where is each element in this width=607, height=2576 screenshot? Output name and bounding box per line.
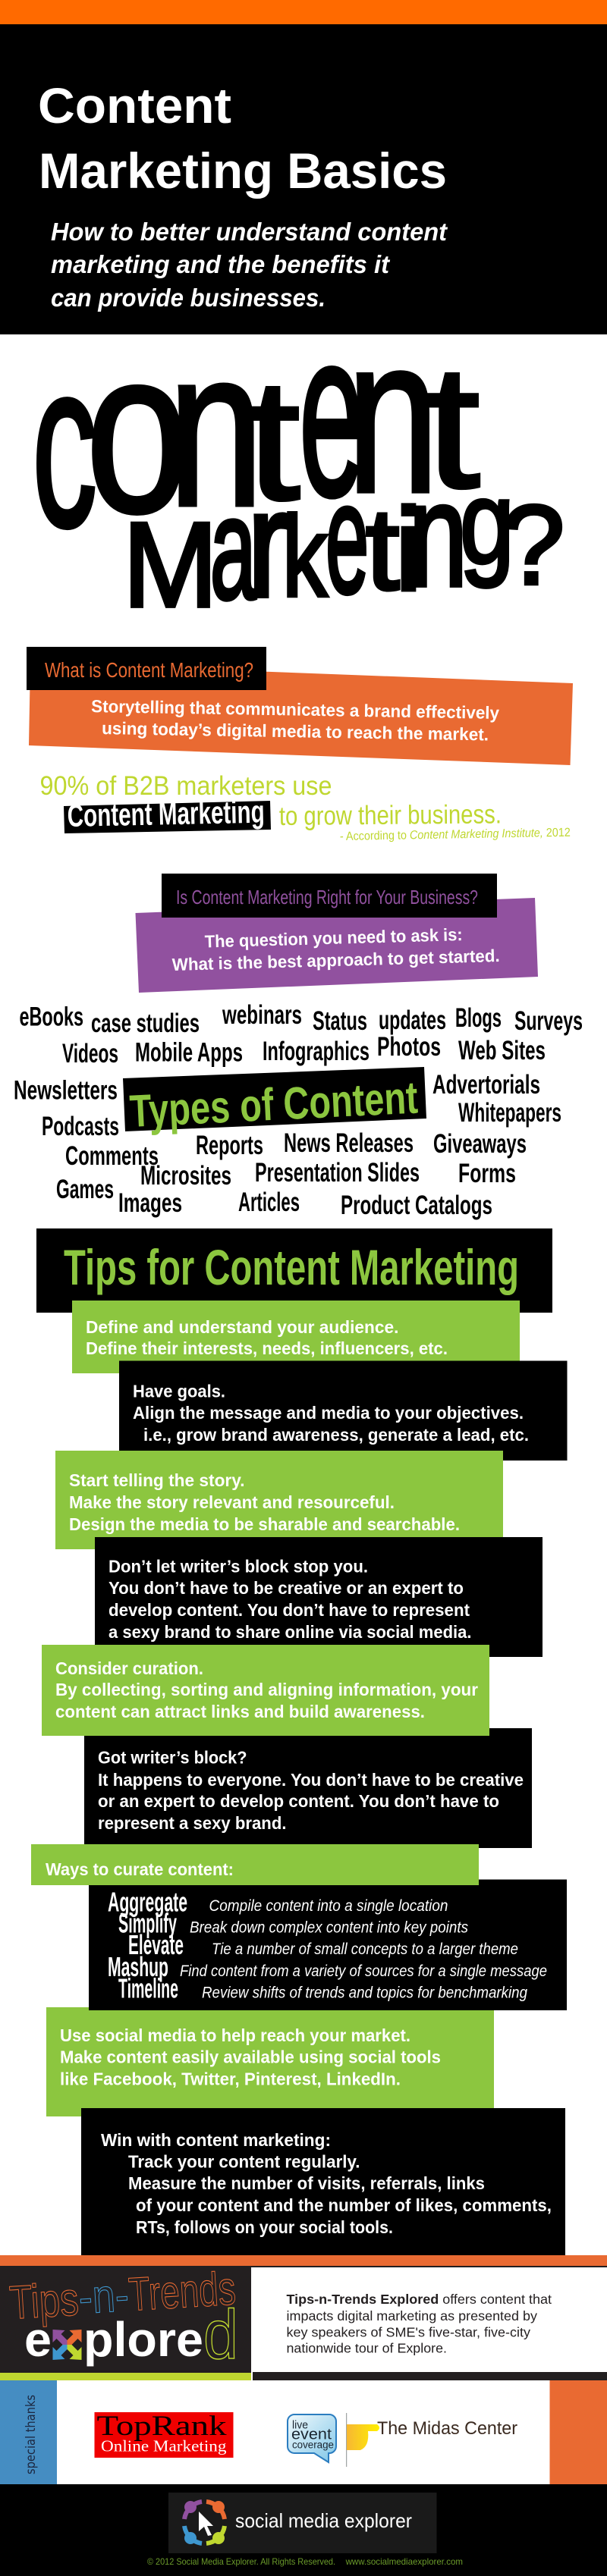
- icon: pointing hand: [347, 2424, 379, 2450]
- stat: 90% of B2B marketers: [39, 771, 571, 843]
- subtitle: [51, 218, 448, 312]
- word cloud: types of content: webinars: [222, 1000, 302, 1030]
- word cloud: types of content: News Releases: [284, 1128, 414, 1158]
- tip 8: use social media: [46, 2007, 567, 2116]
- word cloud: types of content: eBooks: [20, 1002, 83, 1031]
- panel: ways to curate list: [89, 1879, 567, 2010]
- word cloud: types of content: Blogs: [455, 1003, 502, 1033]
- tip 8: use social media: like Facebook, Twitter, Pinterest, LinkedIn.: [60, 2069, 401, 2088]
- word cloud: types of content: Status: [313, 1006, 367, 1036]
- special thanks label: special thanks: [24, 2395, 39, 2474]
- hand-lettered heading: Content Marketing?: e: [299, 282, 364, 546]
- logo wordmark: explored: [24, 2296, 238, 2374]
- tip 6: got writer's block: [84, 1728, 532, 1848]
- curation row: aggregate: Aggregate: [108, 1887, 187, 1917]
- tip 1: define audience: [72, 1301, 520, 1373]
- definition text: using today’s digital media to reach the market.: [102, 718, 489, 744]
- tip 6: got writer's block: It happens to everyone. You don’t have to be creative: [98, 1770, 524, 1790]
- copyright line: [147, 2556, 463, 2567]
- curation row: elevate: Elevate: [128, 1929, 184, 1960]
- word cloud: types of content: Microsites: [140, 1161, 231, 1191]
- tip 1: define audience: Define and understand your audience.: [86, 1317, 399, 1337]
- question text: What is the best approach to get started.: [171, 946, 500, 974]
- hand-lettered heading: Content Marketing?: n: [348, 292, 439, 538]
- tip 4: writer's block: a sexy brand to share online via social media.: [109, 1622, 472, 1642]
- hand-lettered heading: Content Marketing?: g: [460, 457, 514, 588]
- tip 7: ways to curate content: [31, 1844, 479, 1885]
- title: Content: [38, 77, 231, 133]
- wordmark letters: plore: [83, 2312, 203, 2367]
- tip 6: got writer's block: or an expert to develop content. You don’t have to: [98, 1791, 499, 1811]
- tip 5: consider curation: [42, 1645, 489, 1736]
- copyright line: © 2012 Social Media Explorer. All Rights Reserved.: [147, 2556, 335, 2567]
- tip 5: consider curation: content can attract links and build awareness.: [55, 1702, 425, 1721]
- tip 6: got writer's block: Got writer’s block?: [98, 1748, 247, 1768]
- curation row: mashup: Mashup: [108, 1951, 168, 1982]
- tip 2: have goals: Have goals.: [133, 1382, 225, 1401]
- word cloud: types of content: Product Catalogs: [341, 1191, 492, 1220]
- panel: what is content marketing: [27, 647, 573, 765]
- word cloud: types of content: Articles: [238, 1188, 300, 1217]
- tip 4: writer's block: You don’t have to be creative or an expert to: [109, 1578, 464, 1598]
- curation row: elevate: [128, 1929, 518, 1960]
- question text: The question you need to ask is:: [204, 924, 463, 951]
- hand-lettered heading: Content Marketing?: t: [426, 329, 480, 524]
- hand-lettered heading: Content Marketing?: r: [247, 459, 289, 629]
- logo: toprank online marketing: [94, 2411, 234, 2458]
- tip 3: telling the story: Make the story relevant and resourceful.: [69, 1492, 395, 1512]
- question text: [171, 924, 500, 974]
- word cloud: types of content: Podcasts: [42, 1112, 119, 1141]
- word cloud: types of content: Web Sites: [458, 1036, 546, 1065]
- icon: four-way arrows: [53, 2330, 82, 2360]
- curation row: timeline: [118, 1973, 527, 2004]
- icon: ring with cursor: [184, 2502, 225, 2543]
- source citation: - According to Content Marketing Institute, 2012: [340, 827, 571, 843]
- tip 3: telling the story: [55, 1451, 503, 1549]
- tip 8: use social media: Make content easily available using social tools: [60, 2047, 441, 2067]
- panel: special thanks: [0, 2380, 607, 2484]
- definition text: Storytelling that communicates a brand effectively: [91, 696, 499, 723]
- curation row: aggregate: [108, 1887, 448, 1917]
- logo: social media explorer: [168, 2493, 437, 2553]
- hand-lettered heading: Content Marketing?: e: [326, 450, 369, 626]
- copyright line: www.socialmediaexplorer.com: [345, 2556, 463, 2567]
- tip 4: writer's block: develop content. You don’t have to represent: [109, 1600, 470, 1620]
- description text: key speakers of SME's five-star, five-city: [287, 2325, 530, 2340]
- curation row: aggregate: Compile content into a single location: [209, 1897, 448, 1915]
- description text: nationwide tour of Explore.: [287, 2341, 447, 2356]
- label: what is content marketing: What is Content Marketing?: [45, 658, 253, 682]
- description text: impacts digital marketing as presented by: [287, 2308, 537, 2323]
- description text: Tips-n-Trends Explored offers content that: [287, 2292, 552, 2307]
- tip 9: win with content marketing: RTs, follows on your social tools.: [136, 2217, 393, 2237]
- word cloud: types of content: [14, 1000, 583, 1220]
- curation row: simplify: [118, 1908, 468, 1938]
- word cloud: types of content: Comments: [65, 1141, 159, 1171]
- tip 2: have goals: [119, 1360, 568, 1461]
- heading: tips for content marketing: [36, 1228, 552, 1313]
- tip 8: use social media: Use social media to help reach your market.: [60, 2025, 410, 2045]
- title: Marketing Basics: [39, 143, 447, 199]
- logo wordmark: explored: e: [24, 2312, 52, 2367]
- word cloud: types of content: Giveaways: [433, 1129, 527, 1159]
- label: content marketing: Content Marketing: [67, 794, 265, 833]
- subtitle: marketing and the benefits it: [51, 250, 391, 278]
- tip 2: have goals: i.e., grow brand awareness, generate a lead, etc.: [143, 1425, 529, 1445]
- hand-lettered heading: Content Marketing?: t: [366, 485, 399, 614]
- logo wordmark: social media explorer: [235, 2509, 412, 2532]
- word cloud: types of content: Games: [56, 1175, 114, 1204]
- tip 6: got writer's block: represent a sexy brand.: [98, 1813, 287, 1833]
- tip 5: consider curation: Consider curation.: [55, 1658, 203, 1678]
- word cloud: types of content: Images: [118, 1188, 182, 1218]
- logo wordmark: tips-n-trends: Tips: [8, 2273, 80, 2330]
- hand-lettered heading: Content Marketing?: i: [395, 485, 423, 616]
- curation row: simplify: Break down complex content into key points: [190, 1919, 468, 1937]
- tip 9: win with content marketing: Track your content regularly.: [128, 2152, 360, 2172]
- panel: tips-n-trends explored: [0, 2255, 607, 2380]
- logo: live event coverage: live: [292, 2419, 308, 2432]
- header panel: [0, 0, 607, 334]
- logo wordmark: tips-n-trends: [8, 2262, 237, 2330]
- logo: toprank online marketing: TopRank: [97, 2411, 227, 2442]
- word cloud: types of content: case studies: [91, 1009, 200, 1038]
- curation row: simplify: Simplify: [118, 1908, 177, 1938]
- tip 3: telling the story: Start telling the story.: [69, 1470, 244, 1490]
- stat continuation: to grow their business.: [279, 799, 502, 831]
- hand-lettered heading: Content Marketing?: M: [123, 497, 218, 632]
- tip 7: ways to curate content: Ways to curate content:: [46, 1859, 234, 1879]
- label: right for your business: Is Content Marketing Right for Your Business?: [176, 886, 478, 908]
- tip 2: have goals: Align the message and media to your objectives.: [133, 1403, 524, 1423]
- hand-lettered heading: Content Marketing?: k: [282, 492, 328, 620]
- tip 5: consider curation: By collecting, sorting and aligning information, your: [55, 1680, 478, 1699]
- subtitle: How to better understand content: [51, 218, 448, 246]
- logo: toprank online marketing: Online Marketing: [101, 2437, 227, 2455]
- logo: live event coverage: event: [291, 2427, 332, 2443]
- logo: live event coverage: [288, 2414, 336, 2462]
- curation row: mashup: Find content from a variety of sources for a single message: [180, 1963, 547, 1980]
- title: [38, 77, 447, 199]
- logo: the midas center: The Midas Center: [377, 2418, 517, 2439]
- description text: [287, 2292, 552, 2356]
- stat: 90% of B2B marketers: 90% of B2B marketers use: [39, 771, 332, 801]
- tip 3: telling the story: Design the media to be sharable and searchable.: [69, 1514, 460, 1534]
- word cloud: types of content: Newsletters: [14, 1075, 118, 1106]
- hand-lettered heading: Content Marketing?: ?: [502, 482, 565, 608]
- curation row: elevate: Tie a number of small concepts to a larger theme: [212, 1941, 518, 1958]
- word cloud: types of content: Reports: [196, 1131, 263, 1160]
- hand-lettered heading: Content Marketing?: c: [32, 313, 97, 576]
- tip 9: win with content marketing: [81, 2108, 565, 2255]
- curation row: timeline: Timeline: [118, 1973, 178, 2004]
- word cloud: types of content: Advertorials: [432, 1070, 540, 1100]
- word cloud: types of content: Photos: [377, 1032, 441, 1062]
- word cloud: types of content: Infographics: [263, 1037, 370, 1066]
- logo: live event coverage: coverage: [292, 2439, 334, 2450]
- hand-lettered heading: Content Marketing?: [32, 282, 565, 632]
- tip 9: win with content marketing: Win with content marketing:: [101, 2130, 331, 2150]
- curation row: timeline: Review shifts of trends and topics for benchmarking: [202, 1985, 527, 2002]
- definition text: [91, 696, 499, 744]
- hand-lettered heading: Content Marketing?: t: [247, 344, 300, 535]
- word cloud: types of content: Mobile Apps: [135, 1037, 243, 1068]
- tip 9: win with content marketing: Measure the number of visits, referrals, links: [128, 2173, 485, 2193]
- curation row: mashup: [108, 1951, 547, 1982]
- word cloud: types of content: Videos: [62, 1039, 118, 1068]
- outlined d: d: [203, 2296, 238, 2374]
- label: types of content: Types of Content: [128, 1072, 419, 1137]
- tip 4: writer's block: Don’t let writer’s block stop you.: [109, 1556, 368, 1576]
- footer panel: [0, 2484, 607, 2576]
- tip 4: writer's block: [95, 1537, 543, 1657]
- hand-lettered heading: Content Marketing?: o: [86, 303, 189, 560]
- tip 9: win with content marketing: of your content and the number of likes, comments,: [136, 2195, 552, 2215]
- hand-lettered heading: Content Marketing?: n: [168, 303, 263, 553]
- subtitle: can provide businesses.: [51, 284, 326, 312]
- hand-lettered heading: Content Marketing?: n: [409, 452, 467, 617]
- word cloud: types of content: Presentation Slides: [255, 1158, 420, 1188]
- word cloud: types of content: updates: [379, 1006, 446, 1035]
- logo wordmark: tips-n-trends: Trends: [127, 2262, 237, 2321]
- panel: is content marketing right: [135, 874, 538, 993]
- logo wordmark: tips-n-trends: -n-: [77, 2269, 131, 2324]
- word cloud: types of content: Forms: [458, 1159, 516, 1188]
- tip 1: define audience: Define their interests, needs, influencers, etc.: [86, 1338, 448, 1358]
- hand-lettered heading: Content Marketing?: a: [210, 467, 256, 629]
